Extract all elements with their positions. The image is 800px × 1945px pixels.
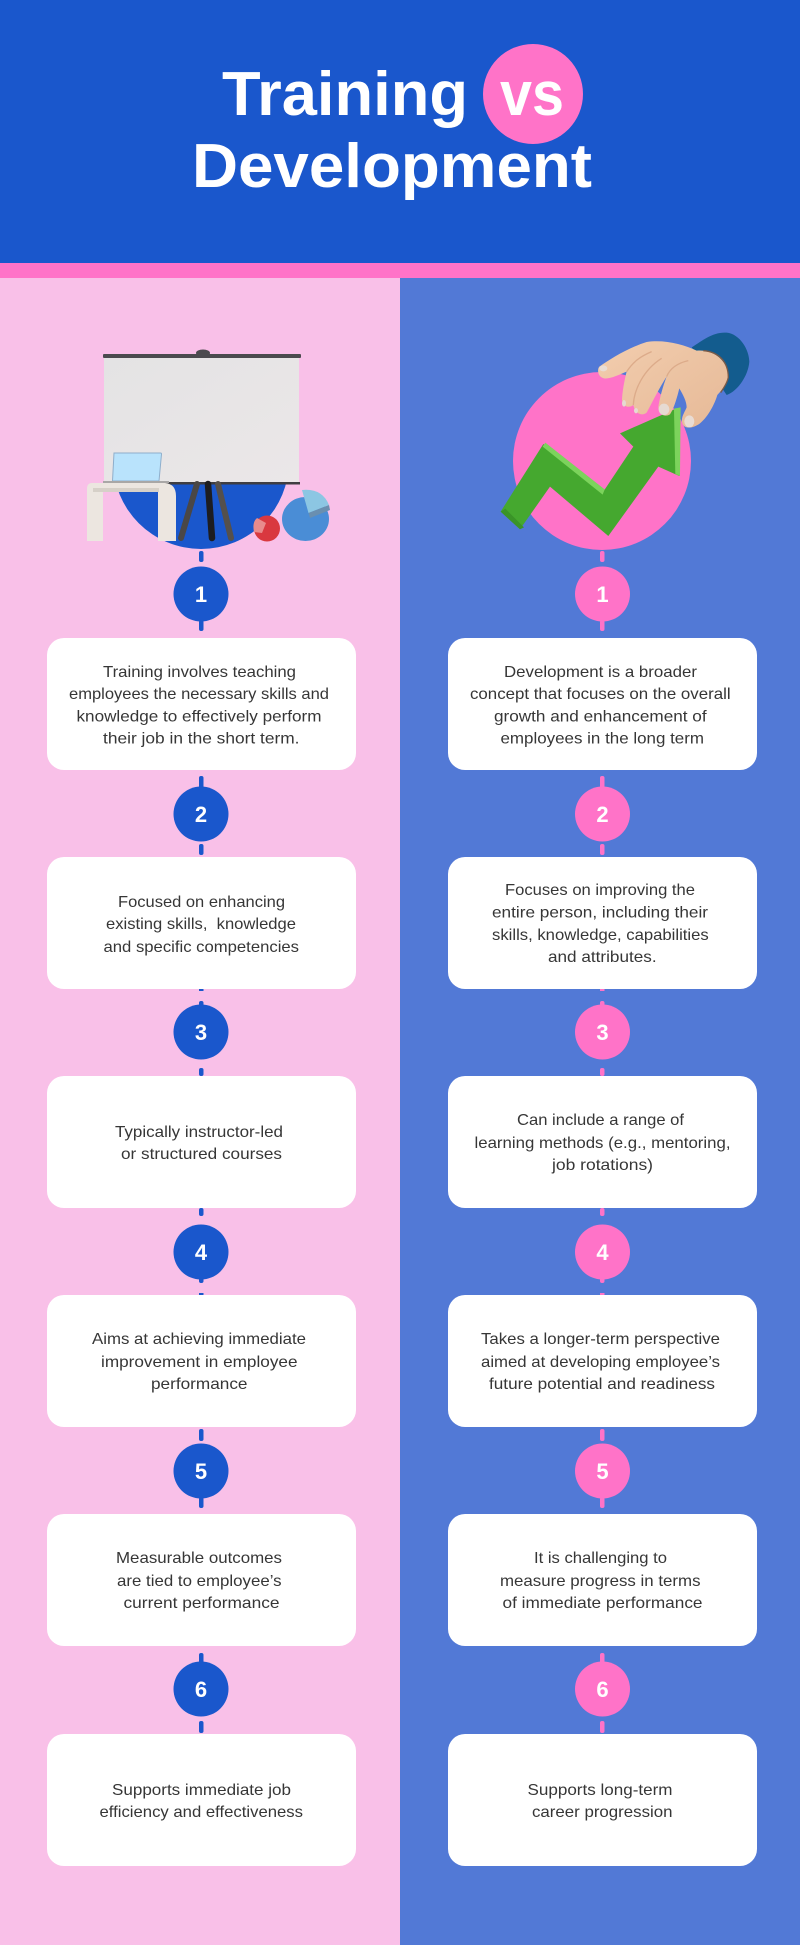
card 5: are tied to employee’s [117, 1573, 282, 1590]
icon: hand lifting green growth arrow [501, 333, 749, 550]
card 2: and attributes. [548, 949, 657, 966]
card 6: efficiency and effectiveness [100, 1804, 303, 1821]
step 2 marker: 2 [596, 802, 609, 827]
card 6: Supports long-term [528, 1782, 672, 1799]
step 6 marker [575, 1653, 630, 1733]
title line: Training: Training [222, 60, 468, 129]
panel: training [0, 278, 400, 1945]
card 4: Takes a longer-term perspective [481, 1331, 720, 1348]
step 5 marker: 5 [195, 1459, 207, 1484]
step 5 marker: 5 [596, 1459, 609, 1484]
card 6: career progression [532, 1804, 672, 1821]
card 4: future potential and readiness [489, 1376, 715, 1393]
step 1 marker: 1 [596, 582, 609, 607]
step 5 marker [174, 1429, 228, 1508]
step 2 marker: 2 [195, 802, 207, 827]
card 2: and specific competencies [104, 939, 299, 956]
card 6 [47, 1734, 356, 1866]
card 3: Typically instructor-led [115, 1124, 283, 1141]
card 1: knowledge to effectively perform [76, 708, 322, 726]
card 3: or structured courses [121, 1146, 282, 1163]
vs badge: vs [500, 60, 564, 129]
step 1 marker [174, 551, 228, 631]
card 2: Focused on enhancing [118, 894, 285, 911]
card 3: learning methods (e.g., mentoring, [474, 1135, 730, 1152]
step 6 marker [174, 1653, 228, 1733]
card 6 [448, 1734, 757, 1866]
step 2 marker [575, 776, 630, 855]
card 1: Training involves teaching [103, 664, 296, 681]
card 3: job rotations) [551, 1157, 653, 1174]
card 2 [47, 857, 356, 989]
step 1 marker [575, 551, 630, 631]
step 6 marker: 6 [195, 1677, 207, 1702]
card 2: Focuses on improving the [505, 882, 695, 899]
step 4 marker [174, 1208, 228, 1296]
card 4 [47, 1295, 356, 1427]
card 4 [448, 1295, 757, 1427]
header banner [0, 0, 800, 263]
icon: presentation screen with desk and pie charts [87, 350, 330, 549]
vs badge [483, 44, 583, 144]
card 1: employees in the long term [500, 730, 704, 748]
step 4 marker [575, 1208, 630, 1296]
card 6: Supports immediate job [112, 1782, 291, 1799]
card 5: current performance [124, 1595, 280, 1612]
card 5: It is challenging to [534, 1550, 667, 1567]
title line: Development: Development [192, 132, 592, 201]
card 2 [448, 857, 757, 989]
card 5 [448, 1514, 757, 1646]
card 1: their job in the short term. [103, 730, 300, 748]
step 4 marker: 4 [195, 1240, 208, 1265]
card 1 [448, 638, 757, 770]
card 2: entire person, including their [492, 904, 709, 922]
card 5: measure progress in terms [500, 1573, 700, 1590]
card 5 [47, 1514, 356, 1646]
card 4: aimed at developing employee’s [481, 1354, 720, 1371]
card 2: skills, knowledge, capabilities [492, 927, 709, 944]
step 3 marker [174, 989, 228, 1076]
card 3 [47, 1076, 356, 1208]
step 6 marker: 6 [596, 1677, 609, 1702]
pink divider band [0, 263, 800, 278]
card 1 [47, 638, 356, 770]
card 4: performance [151, 1376, 248, 1393]
step 2 marker [174, 776, 228, 855]
card 1: growth and enhancement of [494, 708, 707, 726]
panel: development [400, 278, 800, 1945]
card 2: existing skills, knowledge [106, 916, 296, 933]
step 5 marker [575, 1429, 630, 1508]
card 1: concept that focuses on the overall [470, 686, 731, 703]
card 4: improvement in employee [101, 1354, 298, 1371]
card 5: of immediate performance [502, 1595, 703, 1612]
card 5: Measurable outcomes [116, 1550, 282, 1567]
step 3 marker [575, 989, 630, 1076]
step 3 marker: 3 [195, 1020, 207, 1045]
step 1 marker: 1 [195, 582, 207, 607]
card 3 [448, 1076, 757, 1208]
card 4: Aims at achieving immediate [92, 1331, 306, 1348]
card 1: employees the necessary skills and [69, 686, 329, 703]
card 3: Can include a range of [517, 1112, 685, 1129]
step 3 marker: 3 [596, 1020, 609, 1045]
card 1: Development is a broader [504, 664, 698, 681]
step 4 marker: 4 [596, 1240, 609, 1265]
